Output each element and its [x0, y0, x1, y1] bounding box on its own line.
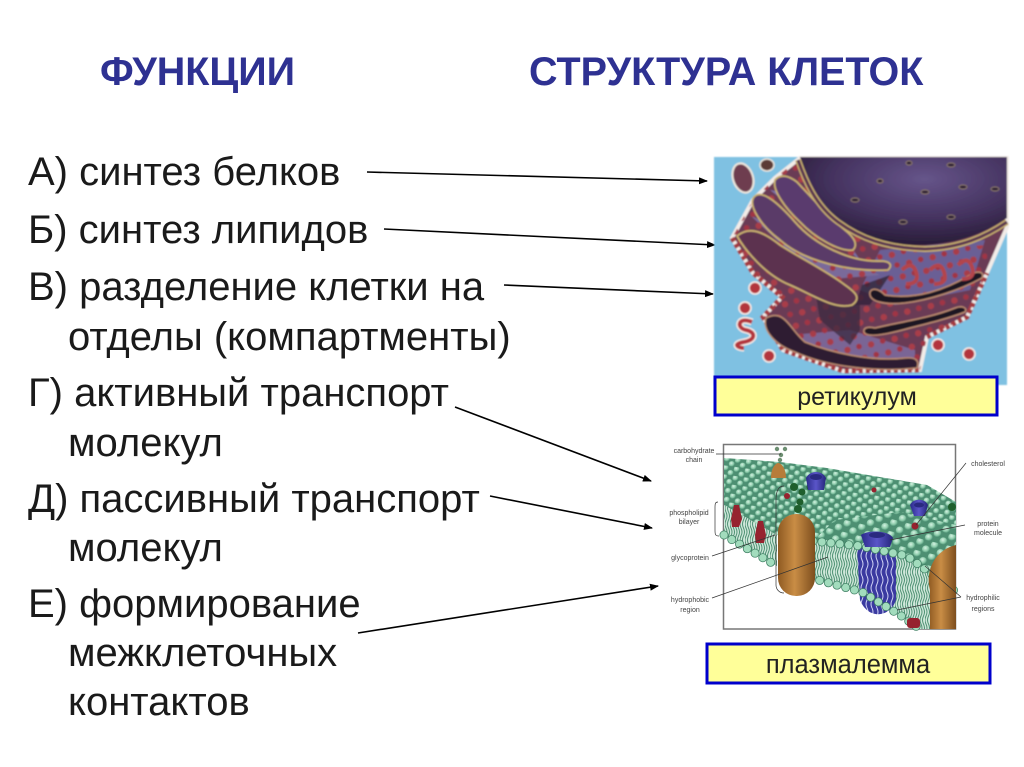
membrane captions: chain: [686, 457, 702, 464]
tails layer: [724, 505, 956, 629]
item В: В) разделение клетки на: [28, 265, 485, 309]
nuclear pores: [851, 161, 999, 224]
small glycoprotein top: [771, 463, 786, 478]
membrane captions: bilayer: [679, 519, 700, 526]
membrane captions: cholesterol: [971, 461, 1005, 468]
membrane captions: region: [680, 607, 700, 614]
illustration: reticulum: [714, 157, 1007, 385]
free ribosomes: [739, 282, 975, 362]
item Д: молекул: [68, 526, 223, 570]
nuclear envelope: [798, 160, 1007, 249]
label box: ретикулум: [715, 377, 997, 415]
item Д: Д) пассивный транспорт: [28, 477, 480, 521]
list of functions: [28, 150, 511, 724]
membrane captions: glycoprotein: [671, 555, 709, 562]
leader lines: [712, 454, 966, 610]
shaded purple areas: [860, 240, 985, 305]
item Б: Б) синтез липидов: [28, 208, 368, 252]
ribosome spirals: [902, 260, 973, 284]
membrane captions: molecule: [974, 530, 1002, 537]
item В: отделы (компартменты): [68, 315, 511, 359]
upper ball surface: [724, 458, 956, 590]
nucleus: [800, 157, 1007, 245]
label box: ретикулум: ретикулум: [797, 383, 917, 411]
dark shadow regions: [815, 290, 860, 345]
blue proteins: [806, 472, 928, 547]
membrane captions: hydrophobic: [671, 597, 710, 604]
membrane captions: regions: [972, 606, 995, 613]
membrane captions: phospholipid: [669, 510, 709, 517]
membrane captions: [669, 448, 1005, 614]
vesicles: [729, 161, 757, 195]
item Е: контактов: [68, 680, 250, 724]
label box: плазмалемма: [707, 644, 990, 683]
title: функции: ФУНКЦИИ: [100, 50, 295, 94]
label box: плазмалемма: плазмалемма: [766, 651, 931, 679]
membrane captions: hydrophilic: [966, 595, 1000, 602]
ribosome speckle: [732, 158, 987, 371]
title: структура клеток: СТРУКТУРА КЛЕТОК: [529, 50, 924, 94]
blue channel lower: [857, 548, 896, 614]
ribosome rim: [732, 238, 987, 371]
membrane captions: carbohydrate: [674, 448, 715, 455]
ball rows along edges: [724, 535, 956, 629]
item Г: Г) активный транспорт: [28, 371, 449, 415]
foreground larger balls: [813, 512, 956, 590]
item Г: молекул: [68, 421, 223, 465]
item Е: межклеточных: [68, 631, 337, 675]
membrane captions: protein: [977, 521, 999, 528]
item А: А) синтез белков: [28, 150, 340, 194]
folded membranes: [737, 231, 857, 306]
glycoprotein: [778, 514, 815, 596]
brown protein right: [929, 545, 956, 629]
illustration: plasma membrane: [669, 444, 1005, 629]
red proteins: [731, 488, 920, 628]
cisternae mass: [732, 158, 1007, 371]
item Е: Е) формирование: [28, 582, 361, 626]
frame: [724, 444, 956, 629]
carbohydrate: [790, 483, 956, 513]
arrows from functions to structures: [358, 172, 715, 633]
